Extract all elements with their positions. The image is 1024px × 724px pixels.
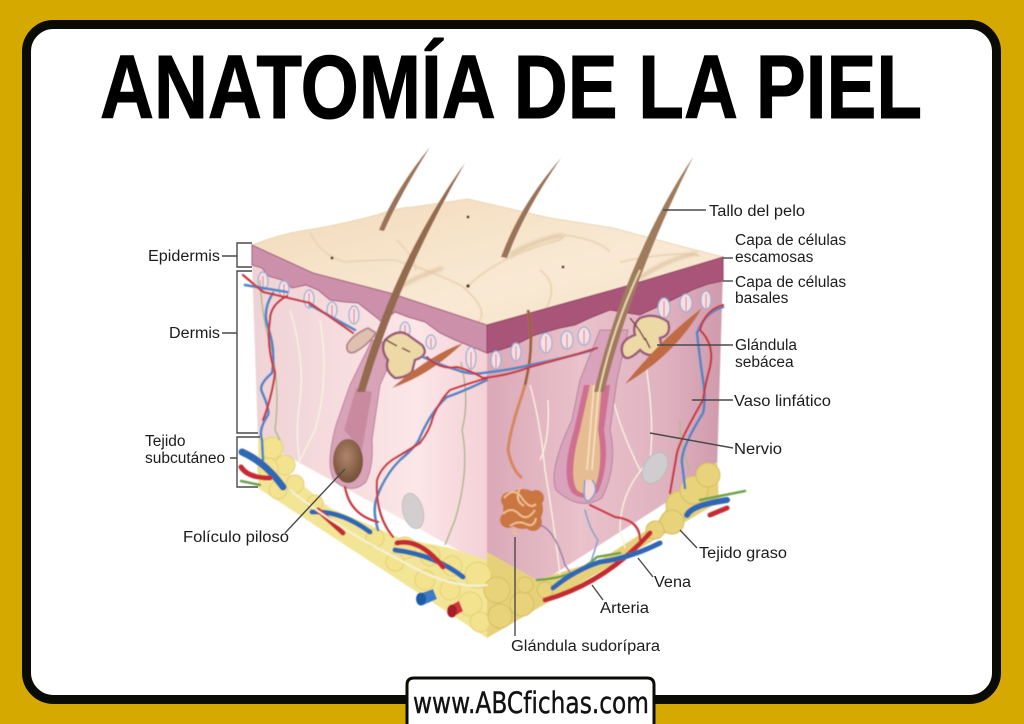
label: capa de células basales: basales — [735, 290, 789, 307]
label: arteria: Arteria — [600, 600, 649, 617]
label: vaso linfático: Vaso linfático — [734, 393, 831, 410]
subcutaneous fat layer — [258, 437, 720, 638]
surface creases — [310, 232, 700, 322]
label: tallo del pelo: Tallo del pelo — [709, 203, 805, 220]
website address: www.ABCfichas.com — [413, 686, 649, 720]
arrector pili muscles — [392, 308, 702, 388]
label: glándula sebácea: Glándula — [735, 337, 797, 354]
epidermis left — [252, 245, 487, 353]
gland ducts — [386, 318, 650, 352]
right face of dermis — [487, 270, 723, 585]
label: glándula sebácea: sebácea — [735, 354, 794, 371]
nerves — [290, 310, 652, 575]
severed vein end — [416, 589, 437, 606]
label: dermis: Dermis — [169, 325, 220, 342]
label: capa de células escamosas: escamosas — [735, 249, 814, 266]
left face of dermis — [252, 262, 487, 566]
hair shadows on surface — [400, 235, 697, 287]
label: tejido subcutáneo: subcutáneo — [145, 450, 225, 467]
pores — [330, 216, 564, 288]
lymph and green vessels — [260, 280, 690, 545]
label: glándula sudorípara: Glándula sudorípara — [511, 638, 660, 655]
severed artery end — [447, 601, 463, 618]
sweat gland and duct — [500, 310, 544, 534]
label: tejido graso: Tejido graso — [699, 545, 787, 562]
label: epidermis: Epidermis — [148, 248, 220, 265]
leader lines and brackets — [222, 210, 733, 636]
papillae capillaries — [263, 276, 706, 368]
veins — [245, 285, 723, 530]
lower left bundle — [242, 452, 283, 487]
label: capa de células escamosas: Capa de células — [735, 232, 846, 249]
duct branches — [585, 510, 598, 565]
labels — [145, 203, 846, 655]
label: nervio: Nervio — [734, 441, 782, 458]
skin surface — [252, 199, 723, 325]
skin block diagram — [241, 147, 745, 638]
sebaceous glands — [347, 316, 669, 378]
label: tejido subcutáneo: Tejido — [145, 433, 186, 450]
blood vessels — [241, 275, 745, 600]
left hair follicle — [330, 340, 398, 488]
epidermis right — [487, 257, 723, 353]
pacinian corpuscles — [399, 448, 673, 531]
label: vena: Vena — [654, 574, 691, 591]
hair shafts — [357, 147, 693, 392]
label: capa de células basales: Capa de células — [735, 274, 846, 291]
arteries — [243, 275, 723, 540]
right hair follicle — [554, 330, 628, 503]
lower right bundle — [537, 553, 620, 580]
label: folículo piloso: Folículo piloso — [183, 529, 289, 546]
dermal papillae — [258, 272, 711, 369]
website badge — [407, 678, 654, 724]
